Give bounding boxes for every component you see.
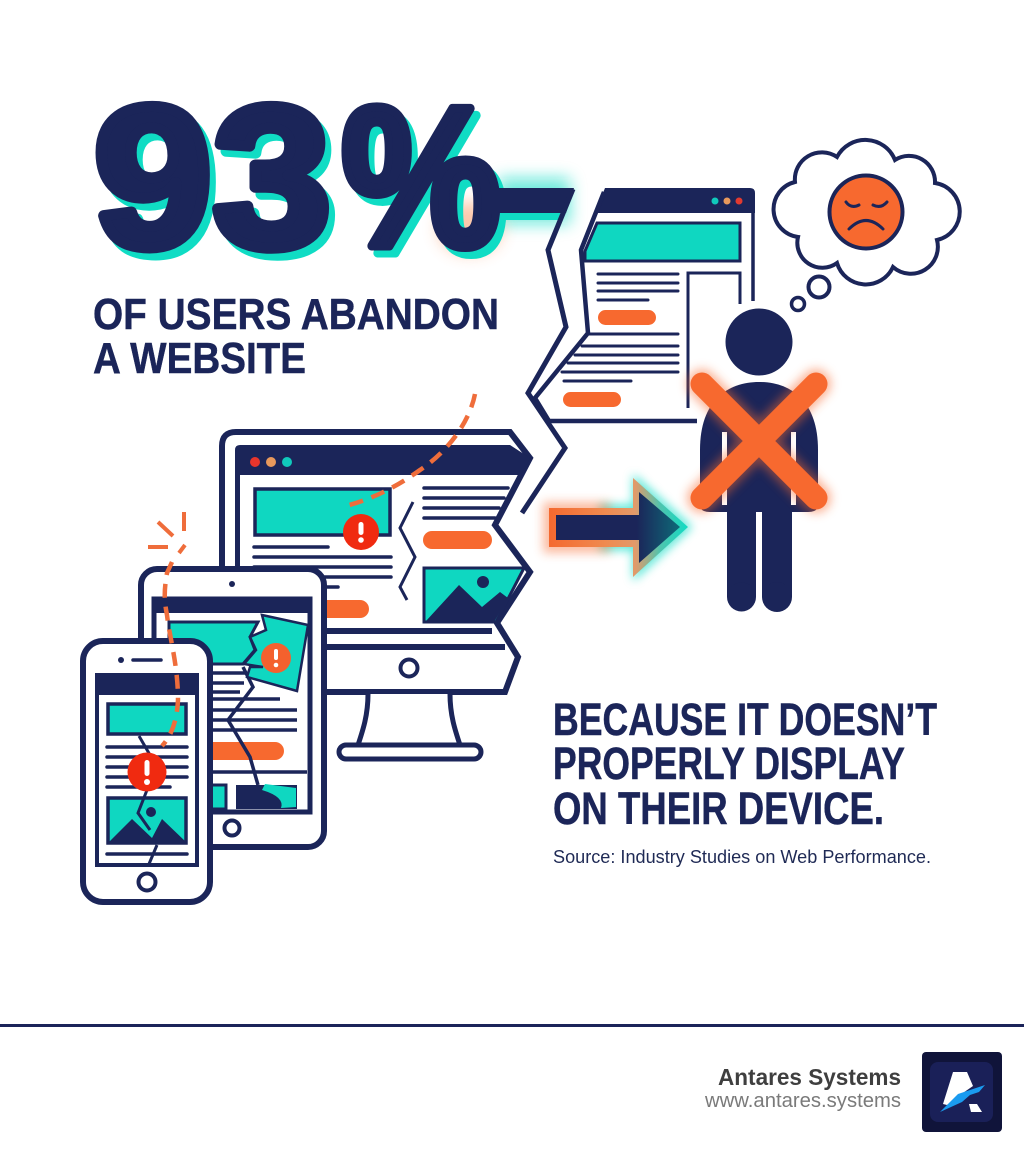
footer brand <box>704 1064 901 1112</box>
monitor power ring <box>400 660 418 676</box>
headline: 93% <box>94 65 574 296</box>
phone image <box>108 798 186 843</box>
caption: because it doesn't display: PROPERLY DISPLAY <box>553 738 905 789</box>
footer divider <box>0 1024 1024 1027</box>
broken browser window <box>535 188 755 421</box>
browser dots <box>712 198 742 204</box>
tablet text lines <box>213 673 297 730</box>
caption: because it doesn't display: BECAUSE IT DOESN’T <box>553 694 937 745</box>
source note: Source: Industry Studies on Web Performance. <box>553 847 931 867</box>
person <box>700 308 818 612</box>
phone crack <box>138 736 157 864</box>
headline: 93%: 3 <box>213 65 331 289</box>
phone text lines <box>107 747 187 854</box>
caption: because it doesn't display <box>553 694 937 834</box>
tablet button <box>195 742 284 760</box>
thought bubble <box>774 140 960 310</box>
dashed failure path, devices <box>162 562 178 746</box>
icon: monitor alert <box>343 514 379 550</box>
headline: 93%: 9 <box>100 72 218 296</box>
arrow towards person <box>543 474 692 581</box>
phone banner <box>108 704 186 734</box>
phone home ring <box>138 874 156 890</box>
monitor banner <box>255 489 390 535</box>
browser buttons <box>563 310 656 407</box>
jagged crack line <box>522 189 573 513</box>
red X over person <box>702 384 816 498</box>
tablet banner <box>169 622 258 664</box>
browser banner <box>585 223 740 261</box>
monitor window dots <box>250 457 292 467</box>
subheading: of users abandon a website: OF USERS ABANDON <box>93 290 499 339</box>
icon: Antares logo <box>922 1052 1002 1132</box>
monitor text lines <box>254 488 508 587</box>
desktop monitor <box>222 432 530 759</box>
tablet home ring <box>224 820 240 836</box>
browser text lines <box>562 274 678 381</box>
subheading: of users abandon a website: A WEBSITE <box>93 334 306 383</box>
smartphone <box>83 641 210 902</box>
headline: 93%: 9 <box>94 65 212 289</box>
tablet broken banner piece <box>244 615 308 691</box>
icon: sad face <box>830 176 902 248</box>
icon: tablet alert <box>261 643 291 673</box>
footer brand: Antares Systems <box>718 1064 901 1090</box>
spark marks <box>148 512 185 553</box>
monitor crack <box>400 502 415 600</box>
headline: 93%: % <box>347 73 507 296</box>
monitor stand <box>358 694 460 745</box>
headline: 93%: 3 <box>219 72 337 296</box>
monitor button <box>300 531 492 618</box>
icon: phone alert <box>128 752 166 792</box>
monitor image <box>424 568 524 622</box>
footer brand: www.antares.systems <box>704 1090 901 1112</box>
headline: 93%: % <box>341 66 501 289</box>
tablet crack <box>228 667 258 785</box>
tablet lower image panels <box>205 784 297 809</box>
tablet <box>141 569 324 847</box>
subheading: of users abandon a website <box>93 290 499 383</box>
dashed failure path, monitor <box>342 394 475 507</box>
caption: because it doesn't display: ON THEIR DEVICE. <box>553 783 884 834</box>
